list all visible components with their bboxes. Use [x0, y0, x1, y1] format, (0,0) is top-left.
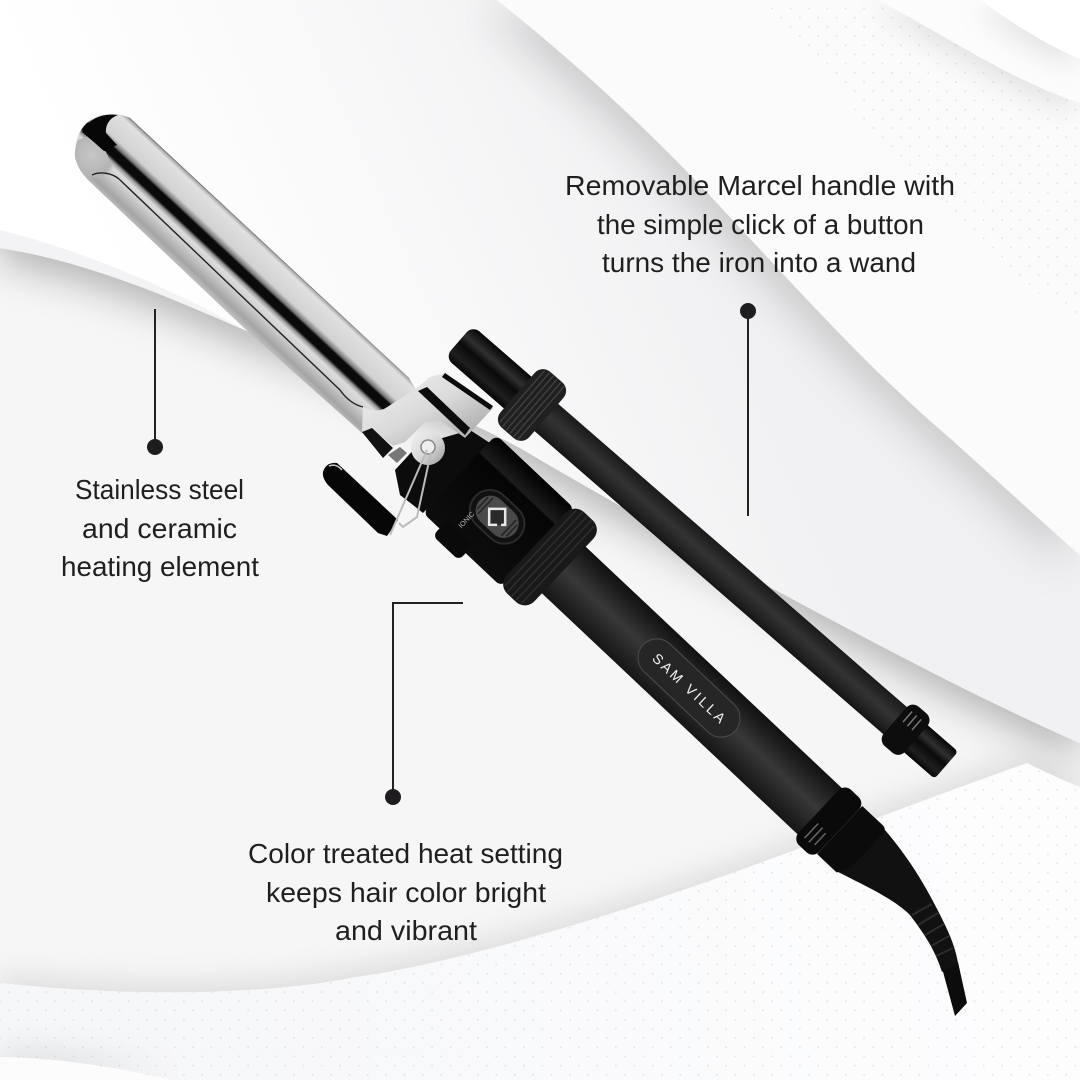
silver clamp bridge — [362, 373, 493, 463]
callout: removable Marcel handle: Removable Marcel handle with — [565, 170, 955, 201]
small label on body: IONIC — [458, 511, 476, 530]
SAM VILLA logo plate — [630, 631, 748, 745]
end ring — [793, 784, 865, 858]
callout: stainless steel heating element: Stainless steel — [75, 474, 244, 505]
end collar — [817, 806, 887, 877]
display button — [462, 482, 533, 552]
wand rod — [520, 391, 914, 740]
clamp tab — [388, 447, 407, 463]
barrel seam — [92, 173, 363, 407]
side button — [433, 520, 474, 560]
callout: color treated heat setting: Color treated heat setting — [248, 838, 563, 869]
thumb lever — [323, 463, 398, 536]
callout: stainless steel heating element — [61, 309, 259, 582]
wand ribbed ring — [493, 365, 571, 445]
wand end ring — [878, 701, 933, 759]
callout: removable Marcel handle: the simple click of a button — [597, 209, 924, 240]
clamp black insert — [362, 428, 393, 458]
barrel tip reflection — [82, 115, 118, 151]
hinge disk and wire — [390, 431, 445, 535]
SAM VILLA logo plate: SAM VILLA — [649, 650, 729, 726]
callout: stainless steel heating element: heating element — [61, 551, 259, 582]
callout: color treated heat setting: keeps hair color bright — [266, 877, 546, 908]
wand tip — [898, 719, 958, 779]
main iron handle assembly — [416, 432, 903, 901]
callout: stainless steel heating element: and ceramic — [82, 513, 237, 544]
detached Marcel wand handle — [435, 313, 971, 793]
barrel cap shading — [75, 136, 118, 180]
callout: color treated heat setting — [248, 603, 563, 946]
ribbed ring — [498, 503, 602, 611]
callout: color treated heat setting: and vibrant — [335, 915, 477, 946]
handle shaft — [528, 534, 852, 844]
barrel — [75, 114, 425, 440]
wand head cap — [445, 326, 542, 418]
callout: removable Marcel handle — [565, 170, 955, 516]
head body — [423, 435, 575, 587]
head collar — [395, 430, 490, 513]
power cord — [942, 962, 967, 1016]
strain relief — [838, 822, 958, 972]
callout: removable Marcel handle: turns the iron into a wand — [602, 247, 916, 278]
